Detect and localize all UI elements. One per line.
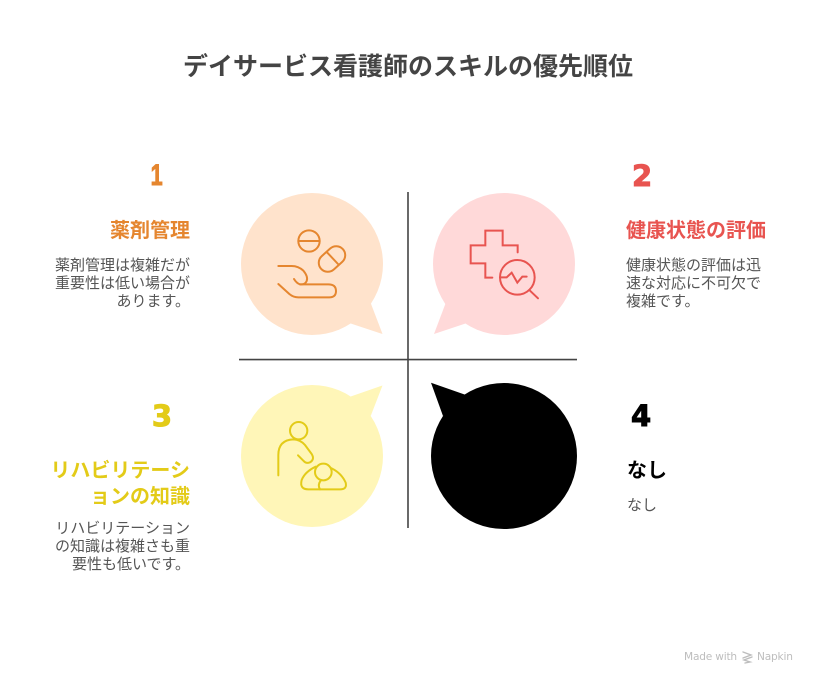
heading: skill 3 [50,460,190,508]
icon: Napkin logo [743,652,752,663]
panel: skill 4 [627,399,667,514]
footer: Made with Napkin [684,651,793,663]
text: skill 3 description: の知識は複雑さも重 [55,538,190,555]
text: skill 2 description: 速な対応に不可欠で [626,275,761,292]
text: skill 2 description: 健康状態の評価は迅 [626,257,761,274]
icon: pills and hand [278,230,349,297]
text: skill 3 description: リハビリテーション [55,520,190,537]
panel: skill 3 [50,399,190,573]
text: skill 3 description [55,520,190,573]
heading: skill 3: ョンの知識 [90,486,190,508]
text: skill 1 description: 薬剤管理は複雑だが [55,257,190,274]
text: skill 1 description: あります。 [116,293,190,310]
heading: skill 4: なし [627,460,667,482]
footer: Made with Napkin: Made with [684,651,737,663]
panel: skill 2 [626,159,766,310]
text: skill 1 description [55,257,190,310]
text: skill 3 description: 要性も低いです。 [72,556,190,573]
number 2: 2 [632,159,652,193]
text: skill 2 description: 複雑です。 [626,293,700,310]
text: skill 4 description: なし [627,497,657,514]
bubble 4: black [431,383,577,529]
text: skill 1 description: 重要性は低い場合が [55,275,190,292]
number 4: 4 [631,399,651,433]
bubble 2: red [433,193,575,335]
footer: Made with Napkin: Napkin [757,651,793,663]
heading: skill 3: リハビリテーシ [50,460,190,482]
bubble 3: yellow [241,385,383,527]
heading: skill 1: 薬剤管理 [110,220,190,242]
number 3: 3 [152,399,172,433]
icon: caregiver and patient [278,422,346,489]
title: デイサービス看護師のスキルの優先順位 [183,53,633,81]
icon: medical cross and magnifier [471,231,538,298]
panel: skill 1 [55,159,190,310]
axis lines [239,192,577,528]
number 1: 1 [150,159,162,192]
bubble 1: orange [241,193,383,335]
heading: skill 2: 健康状態の評価 [626,220,766,242]
text: skill 2 description [626,257,761,310]
